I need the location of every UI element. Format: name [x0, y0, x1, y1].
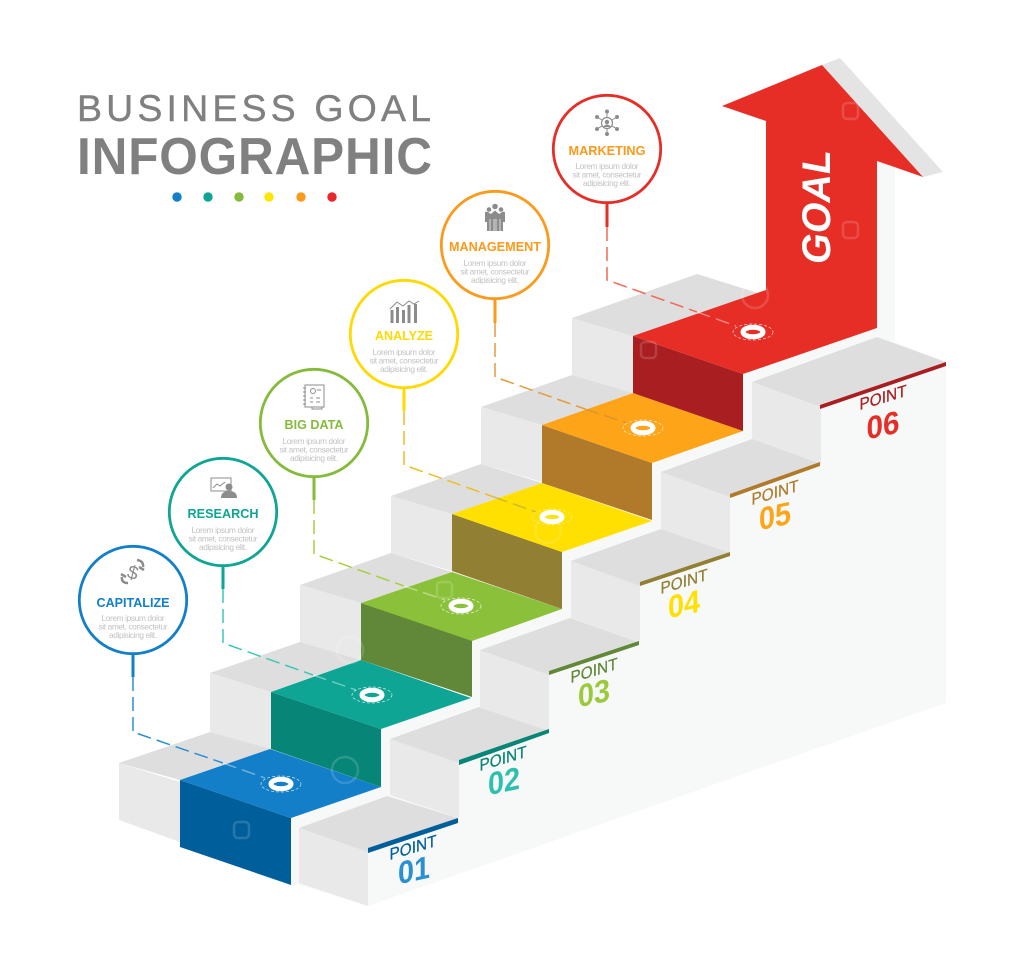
target ring 4 — [532, 509, 572, 525]
arrow shadow side — [822, 58, 943, 177]
callout: analyze: ANALYZE — [375, 328, 433, 343]
point 06 label: 06 — [866, 404, 900, 446]
callout: research: Lorem ipsum dolor — [192, 525, 255, 535]
point 05 label: POINT — [752, 476, 798, 509]
connector: marketing — [607, 204, 736, 326]
step bands — [368, 362, 946, 853]
callout: big data: sit amet, consectetur — [280, 444, 349, 454]
point 02 label — [480, 742, 526, 802]
point 04 label — [660, 565, 708, 625]
title: INFOGRAPHIC — [77, 127, 432, 185]
point 02 label: POINT — [480, 742, 526, 775]
connector: research — [223, 567, 356, 690]
callout: big data: Lorem ipsum dolor — [282, 436, 346, 446]
callout: management: Lorem ipsum dolor — [464, 258, 527, 268]
title: BUSINESS GOAL — [77, 87, 431, 129]
target ring 1 — [261, 776, 301, 792]
connector: capitalize — [133, 655, 265, 778]
callout: research: sit amet, consectetur — [188, 534, 258, 544]
front grey steps — [299, 337, 946, 906]
icon: dollar exchange: $ — [125, 562, 141, 585]
point 05 label: 05 — [759, 495, 791, 537]
connector: big data — [314, 478, 445, 600]
watermark marks — [234, 103, 858, 838]
callout: capitalize: CAPITALIZE — [96, 595, 170, 610]
callout: capitalize: sit amet, consectetur — [98, 622, 168, 632]
callout: analyze: adipisicing elit. — [380, 364, 428, 374]
point 06 label: POINT — [860, 381, 906, 414]
point 05 label — [752, 476, 798, 537]
point 01 label: 01 — [398, 849, 430, 891]
callout: management: adipisicing elit. — [471, 275, 519, 285]
callout: management — [441, 191, 549, 299]
icon: notebook — [303, 385, 324, 409]
red goal arrow — [633, 65, 923, 374]
callout: marketing: sit amet, consectetur — [572, 170, 642, 180]
callout: management: MANAGEMENT — [449, 239, 541, 254]
colour dots row — [172, 192, 337, 202]
callout: research: RESEARCH — [188, 506, 258, 521]
callout: research — [169, 458, 277, 566]
point 01 label — [390, 831, 436, 891]
point 04 label: 04 — [668, 583, 700, 625]
connector: management — [495, 300, 627, 423]
icon: bar chart — [390, 301, 419, 323]
step 3 green — [361, 572, 562, 697]
step 2 teal — [271, 660, 471, 787]
callout: big data — [260, 369, 368, 477]
callout: analyze: Lorem ipsum dolor — [372, 347, 436, 357]
title — [77, 87, 432, 185]
callout: research: adipisicing elit. — [199, 542, 247, 552]
target ring 2 — [352, 687, 392, 703]
callout: analyze — [350, 280, 458, 388]
target ring 3 — [441, 598, 481, 614]
step 5 orange — [542, 393, 743, 520]
callout: capitalize: Lorem ipsum dolor — [102, 613, 165, 623]
point 02 label: 02 — [488, 760, 520, 802]
point 06 label — [860, 381, 906, 446]
step 4 yellow — [452, 483, 652, 609]
callout: analyze: sit amet, consectetur — [370, 356, 439, 366]
icon: people group — [485, 204, 505, 231]
callout: capitalize: adipisicing elit. — [109, 630, 157, 640]
callout: capitalize — [79, 546, 187, 654]
callout: marketing: Lorem ipsum dolor — [576, 161, 639, 171]
callout: management: sit amet, consectetur — [460, 266, 530, 276]
point 01 label: POINT — [390, 831, 436, 864]
connector: analyze — [404, 389, 536, 512]
step 1 blue — [180, 749, 381, 885]
point 03 label: POINT — [570, 654, 618, 687]
callout: marketing: MARKETING — [568, 143, 646, 158]
target ring 6 — [733, 324, 773, 340]
callout: marketing: adipisicing elit. — [583, 178, 631, 188]
point 03 label: 03 — [578, 672, 610, 714]
icon: presenter — [211, 478, 237, 498]
callout: marketing — [553, 95, 661, 203]
goal label: GOAL — [795, 150, 839, 264]
point 03 label — [570, 654, 618, 714]
callout: big data: BIG DATA — [284, 417, 344, 432]
callout: big data: adipisicing elit. — [290, 453, 338, 463]
icon: network hub — [596, 110, 618, 136]
front pale staircase body — [291, 161, 946, 906]
point 04 label: POINT — [660, 565, 708, 598]
target ring 5 — [623, 420, 663, 436]
step 6 riser — [633, 336, 743, 431]
rear grey staircase — [119, 274, 780, 842]
